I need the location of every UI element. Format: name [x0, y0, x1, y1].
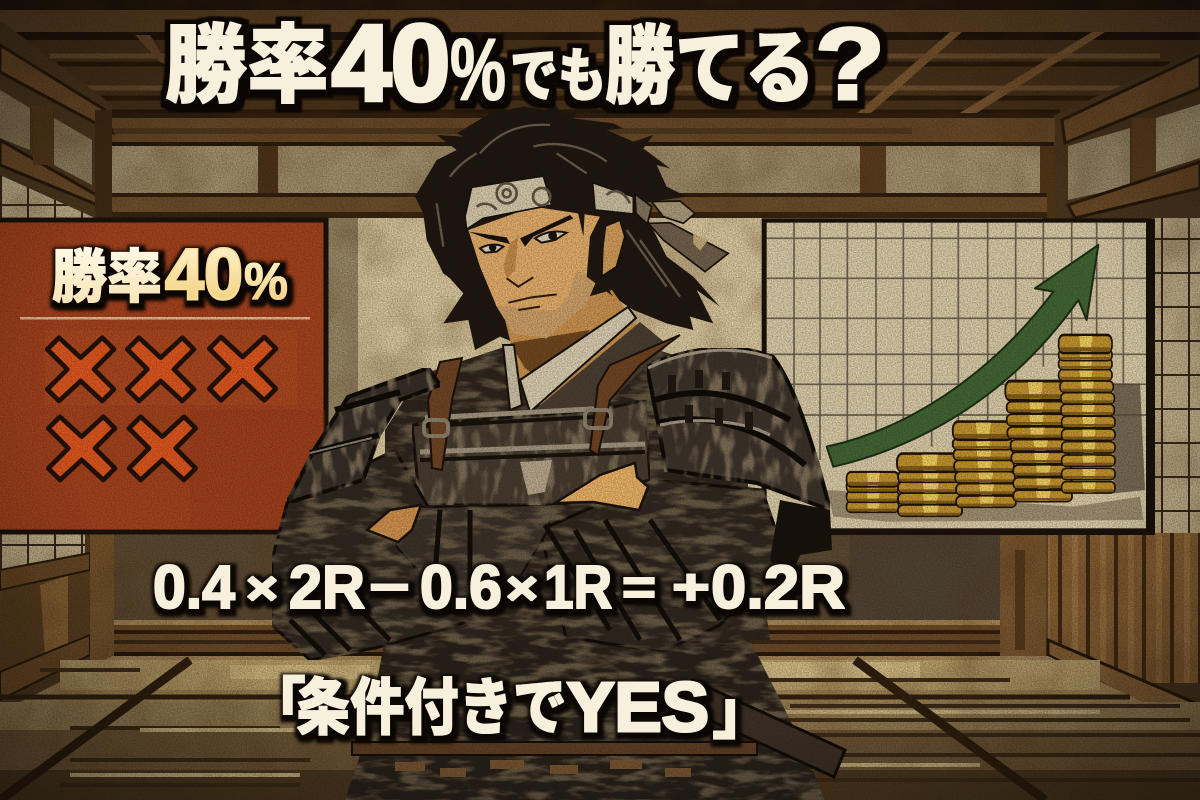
formula: × [506, 562, 538, 614]
panel heading: % [244, 253, 288, 311]
title: % [450, 20, 506, 119]
forearm sleeve [395, 505, 552, 610]
main beam [112, 113, 1054, 147]
divider [20, 317, 310, 320]
icon: coin stacks [847, 335, 1115, 516]
right arm [540, 480, 785, 652]
formula: 1R [544, 553, 612, 621]
shadow behind coins [1113, 383, 1145, 493]
shoulder fringe [770, 500, 832, 580]
belt [352, 742, 757, 755]
formula: 0.2R [711, 553, 845, 621]
title: でも [510, 44, 606, 109]
eyes and brows [468, 215, 573, 253]
neck [505, 290, 640, 412]
chart grid [767, 223, 1146, 460]
collar [520, 307, 636, 412]
right side wall [1048, 50, 1200, 735]
arrow: green rising [827, 245, 1098, 467]
lower body and skirt [345, 640, 825, 800]
panel: win rate 40 percent [0, 220, 326, 532]
hand right [555, 463, 648, 510]
title: てる [675, 24, 815, 113]
tatami floor [0, 656, 1200, 800]
left side wall [0, 20, 114, 720]
panel heading [52, 235, 288, 315]
lower wall [112, 533, 1047, 625]
samurai figure [272, 98, 845, 800]
left shoulder guard [287, 368, 440, 503]
left arm [272, 450, 500, 660]
head [430, 125, 728, 338]
hand left [367, 505, 421, 542]
straps [428, 335, 680, 470]
formula [153, 553, 845, 621]
right shoulder guard [647, 348, 830, 510]
title: 勝 [605, 19, 675, 115]
conclusion: YES [567, 668, 709, 746]
sword [681, 680, 845, 777]
cuirass plate [412, 400, 650, 505]
icons: five cross marks [47, 337, 276, 480]
panel heading: 40 [165, 235, 243, 315]
title: 勝率 [165, 18, 329, 114]
torso armor [385, 335, 770, 640]
face [468, 207, 600, 338]
formula: = [622, 559, 656, 615]
formula: + [672, 559, 710, 615]
formula: − [369, 559, 410, 615]
conclusion [244, 668, 774, 747]
formula: 0.4 [153, 553, 235, 621]
front hair [465, 137, 633, 237]
formula: 0.6 [420, 553, 502, 621]
armour rings [424, 410, 611, 436]
formula: × [246, 562, 278, 614]
conclusion: 「 [244, 673, 306, 742]
formula: 2R [289, 553, 365, 621]
lower rails [112, 535, 1046, 657]
ceiling [0, 0, 1200, 118]
title [165, 2, 885, 123]
title: 40 [332, 2, 450, 123]
sleeve folds [290, 510, 720, 655]
ear [602, 220, 625, 277]
title: ? [815, 7, 885, 121]
transom [112, 146, 1065, 218]
panel: rising chart with coin stacks [762, 218, 1155, 535]
conclusion: 条件付きで [296, 674, 567, 743]
conclusion: 」 [712, 678, 774, 747]
headband [465, 176, 728, 272]
panel heading: 勝率 [52, 245, 162, 310]
skirt tassets [395, 760, 691, 777]
back hair [415, 98, 720, 353]
nose and mouth [507, 277, 557, 310]
back wall [112, 218, 1042, 538]
